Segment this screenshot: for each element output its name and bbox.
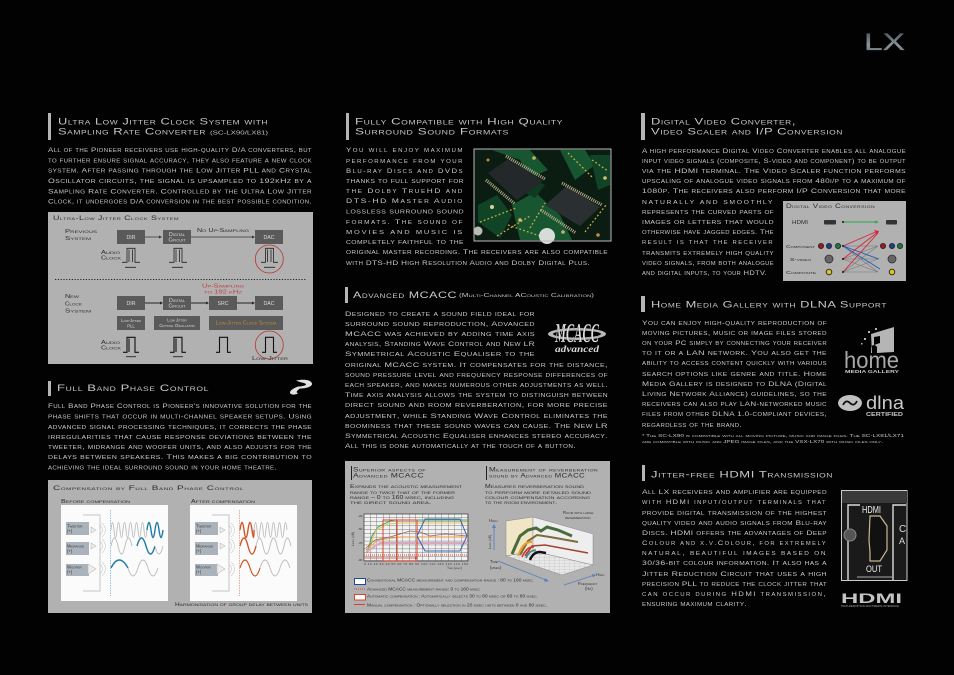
logo: dlna certified: CERTIFIED <box>866 412 904 418</box>
panel: digital video conversion diagram: Composite <box>786 270 816 275</box>
text block: clock system description: Clock, it undergoes D/A conversion in the best possible condition. <box>48 198 312 205</box>
text block: surround formats description: completely faithful to the <box>346 239 464 246</box>
text block: surround formats description: DTS-HD Master Audio <box>346 198 464 205</box>
panel: ultra-low jitter clock system diagram: Clock <box>101 346 121 352</box>
text block: surround formats description: with DTS-HD High Resolution Audio and Dolby Digital Plus. <box>346 260 590 267</box>
text block: acoustic range: the direct sound area. <box>350 500 431 506</box>
text block: digital video description: represents the curved parts of <box>642 209 774 216</box>
panel: ultra-low jitter clock system diagram: Circuit <box>168 238 186 244</box>
logo: HDMI <box>841 590 902 608</box>
text block: MCACC description: MCACC was achieved by adding time axis <box>345 331 536 338</box>
panel: digital video conversion diagram: Digital Video Conversion <box>786 203 875 210</box>
icon: Pioneer logo <box>290 380 312 395</box>
chart: 3D reverberation: Room with large <box>563 510 593 515</box>
chart: after compensation waves: Tweeter <box>196 524 212 528</box>
panel: digital video conversion diagram: S-video <box>790 257 812 262</box>
panel: digital video conversion diagram: HDMI <box>792 220 808 226</box>
panel: ultra-low jitter clock system diagram: No Up-Sampling <box>197 228 249 234</box>
logo: MCACC advanced <box>548 318 606 354</box>
chart: level over time <box>351 514 468 570</box>
text block: digital video description: transmits extremely high quality <box>642 250 774 257</box>
logo: MCACC advanced: MCACC <box>555 318 599 348</box>
text block: digital video description: otherwise have jagged edges. The <box>642 229 774 236</box>
chart: 3D reverberation: reverberation <box>565 515 590 520</box>
text block: MCACC description: Time axis analysis allows the system to distinguish between <box>345 392 608 399</box>
chart: after compensation waves: Midrange <box>196 544 213 548</box>
chart: 3D reverberation: (Hz) <box>585 586 593 591</box>
panel: ultra-low jitter clock system diagram: PLL <box>127 324 135 328</box>
text block: home media gallery description: moving pictures, music or image files stored <box>642 330 827 337</box>
text block: MCACC description: adjustment, while Standing Wave Control eliminates the <box>345 413 608 420</box>
text block: digital video description: result is that the receiver <box>642 239 774 246</box>
text block: MCACC description: each speaker, and makes numerous other adjustments as well. <box>345 382 608 389</box>
legend <box>354 578 547 608</box>
chart: 3D reverberation: Frequency <box>578 581 598 586</box>
text block: home media gallery description: search options like genre and title. Home <box>642 371 827 378</box>
text block: MCACC description: original MCACC system. It compensates for the distance, <box>345 362 608 369</box>
panel: ultra-low jitter clock system diagram: New <box>65 294 79 300</box>
text block: reverberation measurement: colour compensation according <box>485 495 590 501</box>
logo: home media gallery: MEDIA GALLERY <box>845 369 899 374</box>
legend: Automatic compensation : Automatically selects 30 to 80 msec or 60 to 80 msec. <box>367 594 538 599</box>
panel: digital video conversion diagram: Component <box>786 244 815 249</box>
chart: before compensation waves: Midrange <box>67 544 84 548</box>
logo: LX: LX <box>864 29 905 56</box>
text block: digital video description: input video signals (composite, S-video and component) to be output <box>642 158 906 165</box>
panel: compensation by full band phase control: Compensation by Full Band Phase Control <box>53 485 245 492</box>
logo: dlna certified: dlna <box>866 393 905 413</box>
text block: clock system description: to further ensure signal accuracy, they also feature a new clock <box>48 157 312 164</box>
heading: Digital Video Converter: Digital Video Converter, <box>651 116 796 126</box>
chart: 3D reverberation: (msec) <box>490 565 502 570</box>
text block: digital video description: upscaling of analogue video signals from 480i/p to a maximum of <box>642 178 906 185</box>
text block: HDMI description: ensuring maximum clarity. <box>642 601 747 608</box>
chart: 3D reverberation <box>488 510 604 591</box>
panel: ultra-low jitter clock system diagram: System <box>65 236 91 242</box>
panel: ultra-low jitter clock system diagram: Digital <box>169 298 186 304</box>
panel: ultra-low jitter clock system diagram: DAC <box>264 301 275 307</box>
panel: digital video conversion diagram <box>783 201 906 281</box>
text block: HDMI description: can occur during HDMI transmission, <box>642 591 827 598</box>
chart: after compensation waves <box>190 505 297 601</box>
heading: Digital Video Converter: Video Scaler and I/P Conversion <box>651 126 843 136</box>
text block: home media gallery description: receivers can also play LAN-networked music <box>642 401 827 408</box>
text block: MCACC description <box>345 311 609 450</box>
text block: surround formats description: lossless surround sound <box>346 208 464 216</box>
heading: Full Band Phase Control: Full Band Phase Control <box>57 383 209 393</box>
panel: ultra-low jitter clock system diagram: Clock <box>65 301 82 307</box>
panel: ultra-low jitter clock system diagram: Ultra-Low Jitter Clock System <box>53 215 179 222</box>
text block: reverberation measurement <box>485 484 591 506</box>
text block: MCACC description: All this is done automatically at the touch of a button. <box>345 443 576 450</box>
panel: ultra-low jitter clock system diagram: DAC <box>264 235 275 241</box>
heading: Ultra Low Jitter Clock System: (SC-LX90/LX81) <box>210 130 268 136</box>
footnote: are compatible with music and JPEG image files, and the VSX-LX70 with music files only. <box>642 439 883 444</box>
legend: Advanced MCACC measurement range: 0 to 160 msec <box>367 587 481 592</box>
text block: HDMI description: Discs. HDMI offers the advantages of Deep <box>642 530 827 537</box>
text block: surround formats description: formats. The sound of <box>346 219 464 226</box>
heading: Ultra Low Jitter Clock System: Sampling Rate Converter <box>58 126 206 136</box>
heading: Advanced MCACC <box>345 287 594 303</box>
text block: HDMI description: All LX receivers and amplifier are equipped <box>642 489 827 496</box>
text block: reverberation measurement: to the room environment. <box>485 500 557 506</box>
footnote: * The SC-LX90 is compatible with all moving picture, music and image files. The SC-LX81/LX71 <box>642 433 905 438</box>
text block: digital video description: naturally and smoothly <box>642 199 774 206</box>
text block: surround formats description: original master recording. The receivers are also compatible <box>346 249 608 256</box>
panel: ultra-low jitter clock system diagram: System <box>65 308 91 314</box>
text block: clock system description: system. After passing through the Low Jitter PLL and Crystal <box>48 168 312 175</box>
panel: ultra-low jitter clock system diagram: Low Jitter <box>167 318 188 322</box>
logo: dlna certified <box>838 393 905 418</box>
logo: home media gallery: home <box>844 347 899 373</box>
heading: Advanced MCACC: (Multi-Channel ACoustic Calibration) <box>459 293 594 299</box>
text block: digital video description <box>642 148 906 277</box>
panel: ultra-low jitter clock system diagram <box>48 212 313 364</box>
text block: digital video description: via the HDMI terminal. The Video Scaler function performs <box>642 168 906 175</box>
subheading: measurement of reverberation <box>486 466 598 480</box>
text block: full band phase control description: advanced signal processing techniques, it corrects the phase <box>48 424 312 431</box>
text block: surround formats description <box>346 147 608 267</box>
text block: MCACC description: analysis, Standing Wave Control and New LR <box>345 341 535 348</box>
text block: acoustic range: Expands the acoustic measurement <box>350 484 463 490</box>
heading: Fully Compatible <box>346 113 563 140</box>
text block: home media gallery description: You can enjoy high-quality reproduction of <box>642 320 827 327</box>
text block: HDMI description: with HDMI input/output terminals that <box>642 499 827 506</box>
text block: home media gallery description: Living Network Alliance) guidelines, so the <box>642 391 827 398</box>
logo: HDMI: HDMI <box>841 590 902 606</box>
panel: compensation by full band phase control: Harmonisation of group delay between units <box>175 602 308 608</box>
text block: HDMI description: precision PLL to reduce the clock jitter that <box>642 581 827 588</box>
heading: Ultra Low Jitter Clock System <box>48 113 268 140</box>
text block: full band phase control description: irregularities that cause response deviations between the <box>48 434 312 441</box>
subheading: superior aspects: Superior aspects of <box>353 466 426 474</box>
chart: after compensation waves: Woofer <box>196 564 211 570</box>
text block: MCACC description: direct sound and room reverberation, for more precise <box>345 402 609 409</box>
chart: 3D reverberation: Level (dB) <box>488 535 492 549</box>
heading: Fully Compatible: Surround Sound Formats <box>355 126 509 136</box>
text block: digital video description: 1080p. The receivers also perform I/P Conversion that more <box>642 188 906 195</box>
text block: surround formats description: Blu-ray Discs and DVDs <box>346 168 464 175</box>
chart: level over time: -50 <box>358 527 363 531</box>
text block: clock system description: Sampling Rate Converter. Controlled by the Ultra Low Jitter <box>48 188 312 195</box>
text block: acoustic range <box>350 484 463 506</box>
text block: digital video description: A high performance Digital Video Converter enables all analogue <box>642 148 906 155</box>
text block: full band phase control description <box>48 403 312 472</box>
panel: ultra-low jitter clock system diagram: Digital <box>169 232 186 238</box>
heading: Ultra Low Jitter Clock System: Ultra Low Jitter Clock System with <box>58 116 268 126</box>
chart: before compensation waves <box>61 505 168 601</box>
text block: MCACC description: Symmetrical Acoustic Equaliser enhances stereo accuracy. <box>345 433 608 440</box>
text block: HDMI description <box>642 489 827 608</box>
panel: ultra-low jitter clock system diagram: Previous <box>65 229 97 235</box>
chart: after compensation waves: (+) <box>196 570 202 574</box>
text block: full band phase control description: Full Band Phase Control is Pioneer's innovative solution for the <box>48 403 312 410</box>
chart: level over time: -90 <box>358 558 363 562</box>
text block: digital video description: video signals, from both analogue <box>642 260 774 267</box>
text block: MCACC description: Designed to create a sound field ideal for <box>345 311 535 318</box>
chart: level over time: 0 10 20 30 40 50 60 70 80 90 100 110 120 130 140 150 <box>364 562 468 566</box>
subheading: measurement of reverberation: sound by Advanced MCACC <box>489 473 585 480</box>
heading: Jitter-free HDMI <box>642 465 833 481</box>
panel: ultra-low jitter clock system diagram: Audio <box>101 250 120 256</box>
text block: MCACC description: surround sound reproduction, Advanced <box>345 321 535 328</box>
panel: compensation by full band phase control <box>48 480 312 613</box>
subheading: measurement of reverberation: Measurement of reverberation <box>489 466 598 474</box>
panel: ultra-low jitter clock system diagram: Audio <box>101 340 120 346</box>
chart: 3D reverberation: Time <box>490 559 498 564</box>
subheading: superior aspects: Advanced MCACC <box>353 473 424 480</box>
chart: 3D reverberation: High <box>489 518 497 523</box>
chart: before compensation waves: (+) <box>67 528 73 534</box>
photo: HDMI output terminal: C <box>899 524 906 535</box>
heading: Home Media Gallery <box>641 296 887 312</box>
text block: full band phase control description: phase shifts that occur in multi-channel speaker setups. Using <box>48 413 312 420</box>
text block: HDMI description: 30/36-bit colour information. It also has a <box>642 560 827 567</box>
chart: 3D reverberation: High <box>596 572 604 577</box>
text block: HDMI description: Jitter Reduction Circuit that uses a high <box>642 571 827 578</box>
text block: HDMI description: provide digital transmission of the highest <box>642 510 827 517</box>
text block: surround formats description: performance from your <box>346 158 464 165</box>
panel: ultra-low jitter clock system diagram: Low-Jitter <box>121 318 142 323</box>
text block: home media gallery description: regardless of the brand. <box>642 422 742 429</box>
text block: surround formats description: thanks to full support for <box>346 178 464 185</box>
panel: ultra-low jitter clock system diagram: to 192 kHz <box>204 289 243 295</box>
text block: acoustic range: range – 0 to 160 msec, including <box>350 495 454 501</box>
chart: level over time: Level (dB) <box>351 532 355 546</box>
photo: HDMI output terminal: HDMI <box>862 505 881 516</box>
text block: digital video description: and digital inputs, to your HDTV. <box>642 270 767 277</box>
text block: full band phase control description: achieving the ideal surround sound in your home theatre. <box>48 464 277 472</box>
heading: Jitter-free HDMI: Jitter-free HDMI Transmission <box>651 469 833 479</box>
heading: Full Band Phase Control <box>48 381 209 396</box>
text block: HDMI description: Colour and x.v.Colour, for extremely <box>642 540 827 547</box>
text block: home media gallery description: on your PC simply by connecting your receiver <box>642 340 827 347</box>
chart: before compensation waves: (+) <box>67 548 73 554</box>
text block: home media gallery description <box>642 320 827 429</box>
text block: home media gallery description: ability to access content quickly with various <box>642 360 827 367</box>
text block: reverberation measurement: Measures reverberation sound <box>485 484 584 490</box>
text block: surround formats description: movies and music is <box>346 229 464 236</box>
panel: ultra-low jitter clock system diagram: DIR <box>127 301 136 307</box>
panel: MCACC measurement charts <box>345 461 610 613</box>
panel: ultra-low jitter clock system diagram: Up-Sampling <box>202 283 244 289</box>
panel: compensation by full band phase control: Before compensation <box>61 499 130 505</box>
chart: before compensation waves: (+) <box>67 570 73 574</box>
text block: reverberation measurement: to perform more detailed sound <box>485 490 591 496</box>
panel: ultra-low jitter clock system diagram: Low-Jitter Clock System <box>216 320 276 326</box>
logo: HDMI: HIGH-DEFINITION MULTIMEDIA INTERFACE <box>841 605 899 608</box>
text block: surround formats description: You will enjoy maximum <box>346 147 464 154</box>
text block: home media gallery description: Media Gallery is designed to DLNA (Digital <box>642 381 827 388</box>
photo: HDMI output terminal: OUT <box>866 564 882 574</box>
chart: level over time: -70 <box>358 541 363 545</box>
text block: HDMI description: quality video and audio signals from Blu-ray <box>642 520 827 527</box>
text block: surround formats description: the Dolby TrueHD and <box>346 188 464 195</box>
text block: HDMI description: natural, beautiful images based on <box>642 550 827 557</box>
panel: compensation by full band phase control: After compensation <box>191 499 255 505</box>
panel: ultra-low jitter clock system diagram: DIR <box>127 235 136 241</box>
text block: clock system description: Oscillator circuits, the signal is upsampled to 192kHz by a <box>48 178 312 185</box>
text block: MCACC description: Symmetrical Acoustic Equaliser to the <box>345 351 536 358</box>
legend: Manual compensation : Optionally selection in 20 msec units between 0 and 80 msec. <box>367 603 547 608</box>
logo: MCACC advanced: advanced <box>555 344 600 354</box>
heading: Digital Video Converter <box>641 113 843 140</box>
chart: before compensation waves: Woofer <box>67 564 82 570</box>
text block: clock system description <box>48 147 312 205</box>
text block: full band phase control description: delays between speakers. This makes a big contribution to <box>48 454 312 461</box>
subheading: superior aspects <box>351 466 426 480</box>
heading: Fully Compatible: Fully Compatible with High Quality <box>355 116 563 126</box>
text block: acoustic range: range to twice that of the former <box>350 490 455 496</box>
footnote <box>642 433 905 444</box>
text block: digital video description: images or letters that would <box>642 219 774 226</box>
photo: circuit board <box>474 149 611 244</box>
panel: ultra-low jitter clock system diagram: SRC <box>218 301 229 307</box>
chart: level over time: -20 <box>358 514 363 518</box>
text block: full band phase control description: tweeter, midrange and woofer units, and also adjusts for the <box>48 444 312 451</box>
legend: Conventional MCACC measurement and compensation range : 80 to 160 msec <box>367 578 534 583</box>
chart: level over time: Time (msec) <box>447 566 462 570</box>
panel: ultra-low jitter clock system diagram: Low-Jitter <box>252 356 288 362</box>
panel: ultra-low jitter clock system diagram: Circuit <box>168 304 186 310</box>
chart: after compensation waves: (+) <box>196 528 202 534</box>
text block: MCACC description: sound pressure level and frequency response differences of <box>345 372 608 379</box>
text block: home media gallery description: to it or a LAN network. You also get the <box>642 350 827 357</box>
panel: ultra-low jitter clock system diagram: Crystal Oscillator <box>159 323 195 328</box>
text block: clock system description: All of the Pioneer receivers use high-quality D/A converters, but <box>48 147 312 154</box>
text block: home media gallery description: files from other DLNA 1.0-compliant devices, <box>642 411 827 418</box>
heading: Home Media Gallery: Home Media Gallery with DLNA Support <box>651 299 887 309</box>
panel: ultra-low jitter clock system diagram: Clock <box>101 256 121 262</box>
logo: home media gallery <box>844 327 899 374</box>
text block: MCACC description: boominess that these sound waves can cause. The New LR <box>345 423 608 430</box>
photo: HDMI output terminal: A <box>899 536 905 546</box>
chart: before compensation waves: Tweeter <box>67 524 83 528</box>
photo: HDMI output terminal <box>842 490 907 580</box>
chart: after compensation waves: (+) <box>196 548 202 554</box>
heading: Advanced MCACC: Advanced MCACC <box>353 290 457 300</box>
